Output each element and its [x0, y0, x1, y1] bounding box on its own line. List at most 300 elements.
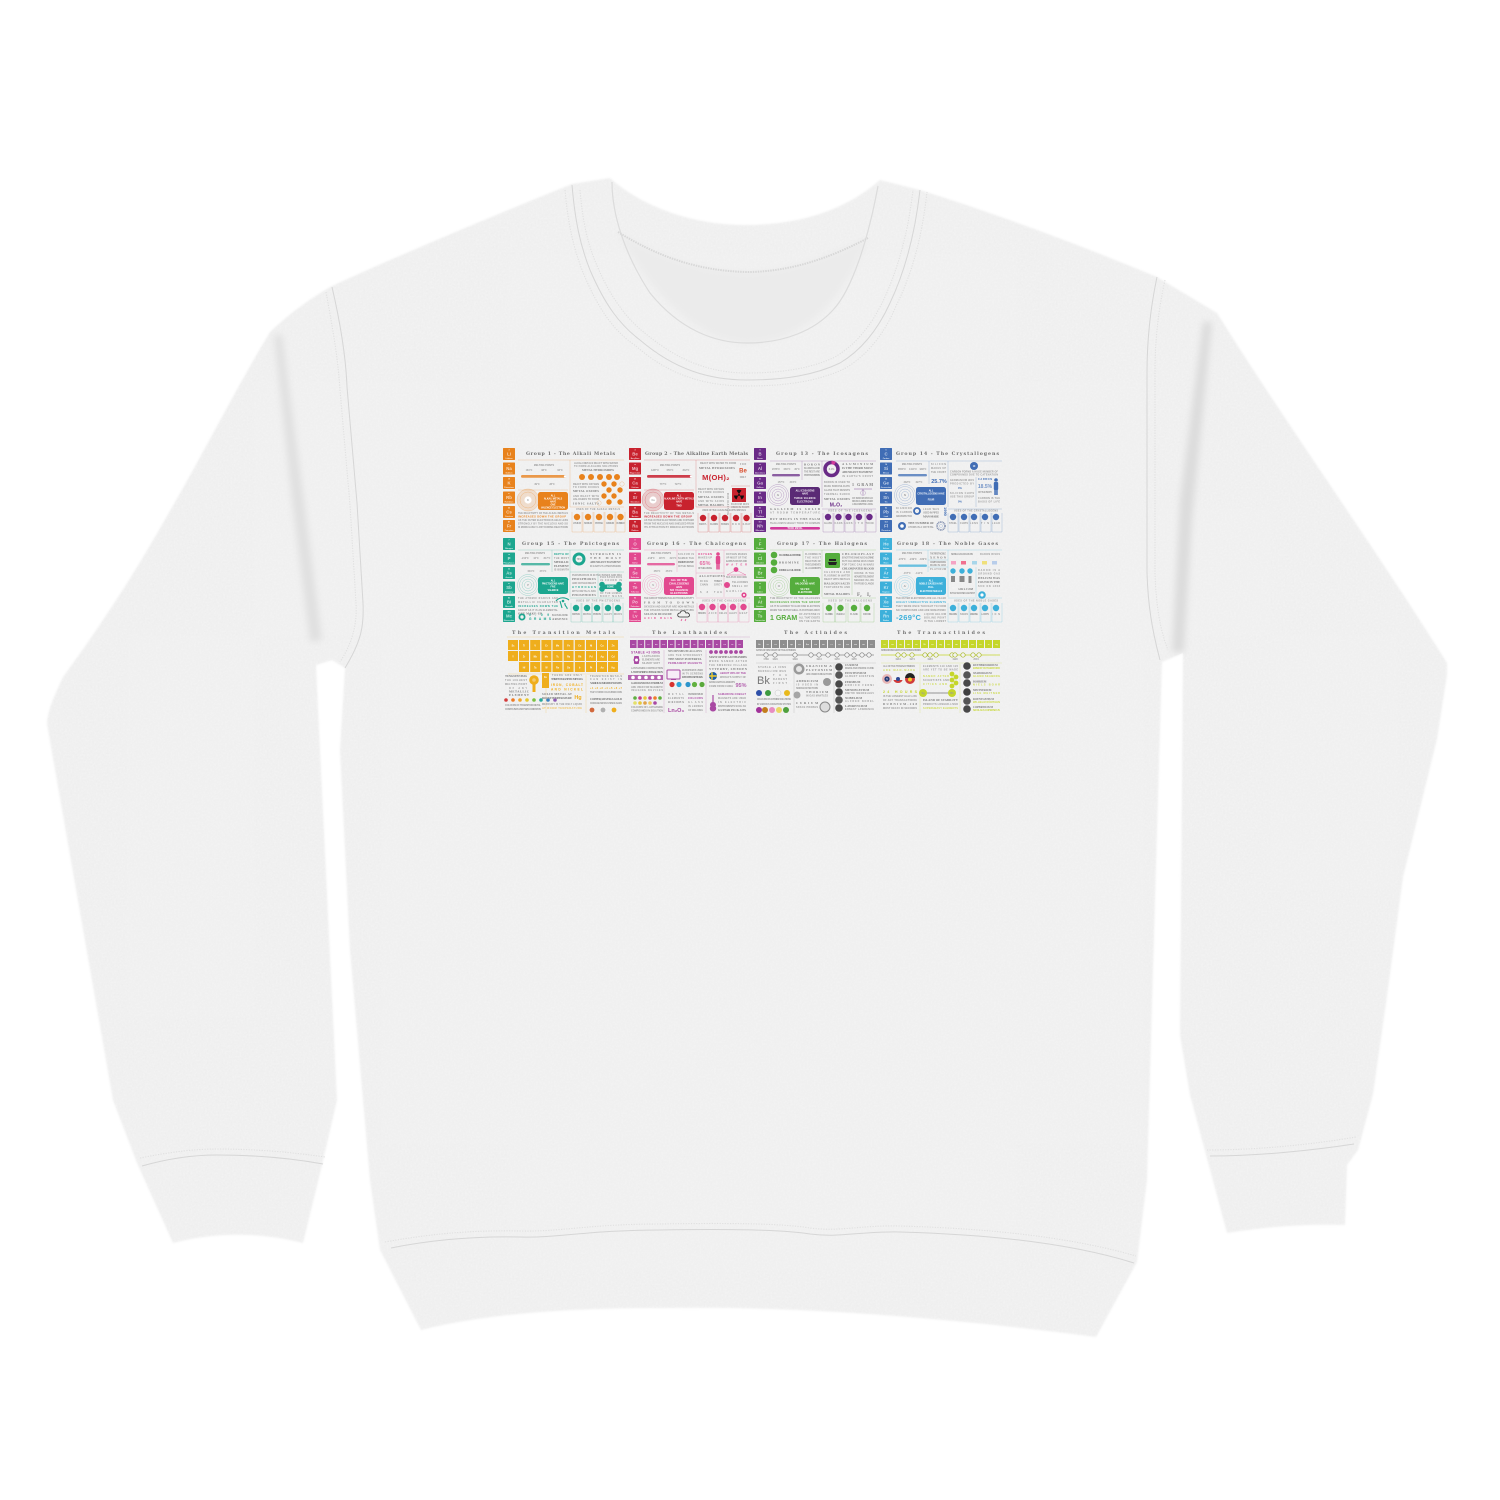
- element column: Radium: [632, 530, 639, 532]
- half-life text: MOST DECAY IN SECONDS: [883, 707, 917, 710]
- predictions text: ELEMENTS 119 AND 120: [923, 665, 959, 668]
- element column: 8: [634, 540, 636, 542]
- silicon stat: THE CRUST: [931, 471, 947, 474]
- discovery timeline: 1899: [792, 658, 798, 661]
- element column: Sb: [506, 585, 512, 590]
- uses cards: X-RAY: [742, 523, 751, 526]
- valence callout: HAVE: [676, 586, 683, 589]
- hem seam: [391, 1229, 1134, 1263]
- element strip: Cn: [947, 644, 951, 646]
- element tile grid: Re: [556, 668, 560, 670]
- melting points chart: -210°C: [521, 557, 529, 560]
- valence callout: THREE VALENCE: [794, 497, 816, 500]
- element strip: Fm: [846, 644, 849, 646]
- berkelium text: THE: [773, 674, 787, 677]
- atom diagram: P: [527, 584, 529, 587]
- 95 percent stat: 95%: [735, 683, 747, 689]
- atom diagram: K: [527, 499, 529, 502]
- element strip: Mt: [923, 643, 926, 646]
- element column: B: [758, 452, 762, 456]
- temperature stat: -269°C: [896, 613, 922, 622]
- magnetic metals text: IRON, COBALT: [551, 683, 583, 687]
- uranium text: AMERICIUM: [796, 679, 818, 683]
- oxides: IN LENSES: [688, 705, 703, 708]
- element strip: [630, 640, 743, 648]
- element column: Gallium: [757, 487, 764, 489]
- valence callout: ALL OF THE: [671, 578, 687, 582]
- element column: 17: [759, 554, 761, 556]
- chloroplast text: FOR TOXIC GAS IN WARS: [842, 564, 874, 566]
- valence callout: ELECTRONS: [798, 592, 813, 594]
- element column: Bromine: [756, 577, 764, 579]
- nitrogen text: THE MOST: [590, 556, 622, 560]
- fluorine text: THE ELEMENTS: [805, 564, 821, 566]
- element column: 87: [508, 522, 510, 524]
- panel: group 18 noble gases: [880, 538, 1002, 623]
- reactivity text: ONE MAKE-UP: [518, 612, 542, 616]
- uranium text: PLUTONIUM: [806, 668, 832, 672]
- valence callout: HAVE: [802, 492, 809, 496]
- 95 percent stat: ABOUT 95% OF THE: [720, 671, 746, 675]
- scientist portraits and names: [963, 662, 1000, 713]
- uses cards: [698, 509, 751, 532]
- element strip: U: [783, 644, 785, 646]
- bismuth text: [554, 552, 570, 572]
- element tile grid: V: [534, 646, 536, 648]
- selenium text: IN THE BIBLE: [678, 565, 694, 568]
- element column: Pb: [883, 510, 889, 514]
- gadolinium text: ARE USED FOR MAGNETIC: [631, 686, 663, 689]
- scientist portraits and names: COPERNICIUM: [973, 706, 993, 709]
- element column: Kr: [884, 585, 889, 590]
- magnetic metals text: THERE ARE ONLY: [552, 674, 582, 677]
- heading: Group 18 - The Noble Gases: [897, 541, 998, 547]
- element strip: Np: [790, 644, 794, 646]
- oxidation states: CAN EXIST IN: [590, 678, 622, 681]
- stability text: PREDICTS LONGER-LIVED: [923, 703, 958, 706]
- rainbow oxidation circles: COLOURS OF TRANSITION METAL: [505, 704, 542, 707]
- uses cards: BONES: [721, 523, 729, 526]
- arsenic stat: IS LETHAL DOSE: [552, 614, 568, 617]
- oxidation states: COINAGE METALS SINCE AGES: [590, 702, 622, 705]
- element tile grid: Ir: [579, 668, 581, 670]
- oxides: METAL: [668, 693, 685, 696]
- icon: magenta bar: TOXIC METAL: [787, 527, 803, 530]
- uses cards: ION: [992, 613, 1000, 616]
- element column: Ts: [758, 614, 763, 618]
- element column: 56: [634, 508, 636, 510]
- reactivity text: INCREASES DOWN THE GROUP: [644, 514, 692, 518]
- chloroplast text: IS NOT THE SAME AS CHLORINE: [842, 556, 874, 560]
- element column: Sn: [883, 495, 889, 500]
- icon: bone: BONE: [607, 586, 614, 588]
- hydroxides and oxides: REACT WITH OXYGEN: [573, 483, 599, 486]
- icon: green square: [825, 553, 840, 568]
- uses cards: [823, 510, 876, 532]
- silicon stat: 25.7%: [931, 479, 947, 485]
- xenon text: XENON: [930, 556, 947, 560]
- element column: At: [758, 600, 763, 604]
- element column: Mc: [506, 614, 513, 618]
- arsenic stat: 0.09: [529, 613, 549, 617]
- aluminium text: ALUMINIUM: [842, 462, 873, 466]
- valence callout: ALL: [929, 580, 934, 582]
- oxides: GLASS: [688, 701, 703, 704]
- unreactive text: HIGHLY UNREACTIVE ELEMENTS: [896, 600, 946, 604]
- element column: 31: [759, 478, 761, 480]
- uses cards: USES OF THE CHALCOGENS: [702, 600, 746, 602]
- uranium text: [794, 664, 832, 712]
- sweden text: WERE NAMED AFTER: [709, 660, 747, 663]
- melting points chart: [898, 552, 927, 575]
- magnetic metals text: AND NICKEL: [551, 688, 583, 692]
- selenium text: [678, 553, 694, 568]
- element column: Xenon: [883, 606, 890, 608]
- metal oxides text: RADIOACTIVE: [726, 493, 729, 515]
- uses cards: [823, 600, 874, 622]
- metal hydroxides formula: REACT WITH WATER TO FORM: [700, 462, 736, 465]
- element strip: Sm: [670, 644, 673, 646]
- icon: sweden flag: [709, 672, 717, 680]
- scientist portraits and names: MENDELEVIUM: [845, 688, 869, 692]
- valence callout: ALL: [677, 494, 682, 498]
- reactivity text: FROM TO DOWN: [644, 600, 695, 604]
- melting points chart: MELTING POINTS: [525, 552, 545, 555]
- melting points chart: [521, 552, 551, 573]
- reactivity text: IS MORE EASILY LOST DURING REACTIONS: [518, 526, 568, 529]
- element column: 81: [759, 508, 761, 510]
- valence callout: TWO: [676, 506, 682, 508]
- element column: O: [633, 542, 637, 546]
- bismuth text: THE MOST: [554, 557, 570, 560]
- element tile grid: Pd: [590, 656, 593, 658]
- element column: Barium: [632, 516, 639, 518]
- uses cards: POISON: [593, 613, 601, 616]
- actinide colour circles: [756, 690, 791, 713]
- element strip: Es: [838, 644, 841, 646]
- alkali metal uses cards: POTASH: [595, 522, 603, 525]
- element column: Iodine: [757, 591, 763, 593]
- uses cards: LEAD: [992, 522, 1000, 525]
- sweden text: YTTERBY, SWEDEN: [709, 667, 748, 671]
- heading: The Transition Metals: [512, 630, 615, 636]
- halide text: FLUORINE IN WATER: [824, 574, 850, 578]
- element strip: Tb: [693, 644, 696, 646]
- uses cards: MATCH: [583, 613, 591, 616]
- mid text: USE THIS GROUP: [950, 496, 974, 498]
- gallium text: BUT MELTS IN THE PALM: [770, 517, 820, 521]
- silicon stat: [931, 463, 947, 485]
- element column: Livermorium: [629, 620, 641, 622]
- chloroplast text: CHLOROPLAST: [842, 552, 875, 556]
- tellurium text and circles: EARTH'S CRUST AND: [726, 560, 747, 563]
- bone text: PHOSPHORUS: [600, 576, 622, 579]
- xenon text: MADE IN 1962: [930, 564, 947, 567]
- bone text: IS FOUND IN: [600, 579, 622, 582]
- unreactive text: THE OUTER ELECTRONS ARE ALL FILLED: [896, 597, 946, 600]
- connected circles: [919, 689, 956, 697]
- berkelium text: [758, 666, 788, 685]
- element column: Nitrogen: [505, 547, 514, 550]
- reactivity text: AS THE OUTER ELECTRONS ARE FURTHER: [644, 519, 694, 522]
- element column: 55: [508, 508, 510, 510]
- scientist portraits and names: ENRICO FERMI: [845, 684, 874, 687]
- element column: Na: [506, 466, 512, 471]
- valence callout: [790, 577, 820, 595]
- element column: Sodium: [506, 472, 513, 474]
- panel: group 1 alkali metals: [503, 448, 625, 532]
- metal hydroxides formula: M(OH)₂: [702, 473, 730, 482]
- melting points chart: 660°C: [784, 468, 791, 471]
- allotropes: RING: [700, 580, 708, 583]
- discovery timeline: 1829: [772, 658, 778, 661]
- tungsten text: METALLIC: [509, 690, 529, 694]
- one gram and balance icon: DRAW A WIRE OVER: [852, 500, 873, 503]
- element column: 51: [508, 583, 510, 585]
- predictions text: ARE YET TO BE MADE: [923, 668, 958, 672]
- hydroxides and oxides: METAL OXIDES: [573, 489, 599, 493]
- half-life text: [883, 690, 918, 710]
- bone text: BODY MASS: [600, 595, 622, 598]
- uses cards: CHIPS: [960, 522, 968, 525]
- element column: [880, 448, 892, 532]
- valence callout: SIX VALENCE: [670, 588, 688, 592]
- discovery timeline: [881, 649, 1000, 661]
- reactivity text: OXYGEN AND SULFUR ARE NON-METALS: [644, 606, 694, 608]
- element column: 34: [634, 568, 637, 570]
- tellurium text and circles: SULFUR DIOXIDE: [726, 576, 747, 579]
- hydroxides and oxides: AND REACT WITH: [573, 495, 599, 498]
- europium text: THE MOST POWERFUL: [668, 657, 702, 661]
- carbon in body: CARBON IS THE: [978, 497, 1000, 500]
- connected circles: Bh: [950, 692, 954, 695]
- element column: Sulfur: [632, 562, 638, 564]
- temperature stat: BOILING POINT: [924, 616, 947, 620]
- radium text: [731, 503, 750, 509]
- element column: 15: [508, 554, 510, 556]
- heading: The Lanthanides: [652, 630, 727, 636]
- melting points chart: MELTING POINTS: [534, 464, 554, 467]
- element column: Ga: [757, 480, 763, 486]
- oxides: PRASEODYMIUM: [688, 693, 703, 696]
- element column: 85: [759, 598, 761, 600]
- element strip: Md: [854, 644, 858, 646]
- melting points chart: 98°C: [541, 469, 547, 472]
- element column: Aluminium: [755, 471, 765, 474]
- element column: 113: [758, 522, 762, 524]
- melting points chart: 115°C: [659, 557, 666, 560]
- gallium/hg text: [542, 692, 582, 710]
- reactivity text: [518, 512, 568, 529]
- panel: group 14 crystallogens: [880, 448, 1002, 532]
- printed periodic table infographic: [503, 448, 1002, 714]
- oxides text: METAL OXIDES: [824, 497, 850, 501]
- allotropes: TRIMET: [714, 580, 723, 583]
- oxides: OXIDES: [668, 700, 684, 704]
- silicon stat: MAKES UP: [931, 467, 946, 470]
- element column: Tl: [758, 510, 762, 514]
- discovery timeline: DATES OF DISCOVERY OF THE ACTINIDES: [756, 649, 796, 652]
- element strip: Tm: [723, 644, 726, 646]
- element strip: Pa: [774, 644, 778, 646]
- halide text: REACT WITH METALS: [824, 578, 850, 581]
- gallium text: THALLIUM IS HIGHLY TOXIC TO HUMANS: [770, 522, 820, 525]
- uses cards: BALLOON: [949, 613, 957, 616]
- reactivity text: THE ATOMIC RADIUS AND: [518, 597, 558, 600]
- one gram and balance icon: A KILOMETRE LONG: [852, 503, 873, 506]
- halide text: HALOGEN SALTS: [824, 582, 850, 586]
- reactivity text: INCREASES DOWN THE GROUP: [518, 514, 566, 518]
- berkelium symbol: Bk: [757, 675, 770, 687]
- element strip: Pr: [648, 644, 650, 646]
- uses cards: RED: [732, 523, 740, 526]
- radon text: HELIUM WAS: [978, 576, 1000, 580]
- selenium text: NAMED THE: [678, 557, 694, 560]
- beryllium exception: F O R: [740, 463, 746, 466]
- melting points chart: 777°C: [660, 483, 667, 486]
- element strip: Rg: [939, 644, 943, 646]
- scientist portraits and names: MARIE AND PIERRE CURIE: [845, 667, 874, 670]
- element column: Arsenic: [506, 576, 512, 579]
- valence callout: [538, 577, 568, 594]
- element column: Si: [884, 466, 888, 471]
- scientist portraits and names: [835, 663, 875, 712]
- uses cards: BLEACH: [836, 613, 845, 616]
- uranium text: CURIUM: [796, 701, 818, 705]
- element column: Antimony: [505, 590, 514, 593]
- element column: 2: [885, 540, 887, 542]
- predictions text: SCIENTISTS AND: [923, 679, 949, 682]
- mid text: SILICON CHIPS: [950, 492, 974, 495]
- aluminium text: ABUNDANT ELEMENT: [842, 470, 874, 474]
- half-life text: 24 HOURS: [883, 690, 918, 694]
- scientist portraits and names: WILHELM RÖNTGEN: [973, 699, 1000, 704]
- uranium text: SMOKE DETECTORS: [796, 687, 818, 690]
- reactivity text: INCREASES DOWN THE: [518, 604, 558, 608]
- element column: Potassium: [504, 486, 514, 489]
- element strip: Th: [766, 644, 769, 646]
- icon: eye of horus: [556, 598, 569, 609]
- allotropes: CHAIN: [700, 584, 708, 586]
- chloroplast text: CHLORINATED BLOOD: [842, 566, 875, 570]
- tungsten text: [505, 674, 530, 697]
- uses cards: USES OF THE HALOGENS: [828, 600, 872, 602]
- uses cards: ALLOY: [729, 612, 737, 615]
- panel: transition metals: [504, 630, 624, 713]
- colour circles grid: COLOURS OF LANTHANIDE: [631, 706, 663, 709]
- melting points chart: [647, 464, 692, 486]
- element strip: Dy: [700, 644, 704, 646]
- element column: Radon: [883, 620, 890, 622]
- valence callout: [790, 487, 820, 505]
- scientist portraits and names: BOHRIUM: [973, 680, 987, 684]
- bone text: [600, 576, 622, 598]
- nitrogen uses text: HYDROGEN: [572, 585, 596, 589]
- metal oxides text: REACT WITH OXYGEN: [698, 488, 724, 491]
- carbon in body: CARBON: [978, 478, 992, 481]
- xenon text: PLATINUM: [930, 568, 946, 571]
- element column: Strontium: [631, 500, 640, 503]
- melting points chart: 63°C: [557, 469, 563, 472]
- berkelium text: RAREST: [773, 678, 788, 681]
- melting points chart: [898, 463, 927, 484]
- carbon isotopes badge: CARBON FORMS A HUGE NUMBER OF: [950, 470, 999, 474]
- melting points chart: -249°C: [909, 558, 917, 561]
- element column: Fr: [507, 524, 511, 528]
- tellurium text and circles: OXYGEN MAKES: [726, 553, 747, 556]
- left sleeve seam: [332, 287, 363, 668]
- donut: nitrogen: 78%: [577, 558, 582, 561]
- element column: I: [759, 585, 761, 590]
- nitrogen text: IN EARTH'S ATMOSPHERE: [590, 565, 621, 568]
- dot row: [709, 650, 743, 654]
- hydroxides and oxides: TO FORM OXIDES: [573, 486, 599, 489]
- element column: Boron: [757, 458, 764, 460]
- element column: Bi: [507, 600, 511, 604]
- icon: light bulb: [529, 675, 539, 692]
- scientist portraits and names: DMITRI MENDELEEV: [845, 692, 874, 695]
- bismuth text: DEPTH OF: [554, 552, 569, 556]
- sweatshirt: [0, 150, 1500, 1350]
- oxygen stat and body icon: OXYGEN: [698, 552, 712, 556]
- uranium text: ARE USED IN REACTORS: [806, 673, 832, 676]
- predictions text: NAMED AFTER: [923, 674, 949, 678]
- icon: circle: [898, 522, 906, 530]
- melting points chart: 650°C: [667, 469, 674, 472]
- uses cards: GLASS: [824, 522, 832, 525]
- ring icon and text: MAN-MADE: [923, 514, 939, 518]
- oxides text: [824, 481, 850, 508]
- mid text: GERMANIUM WAS: [950, 479, 974, 482]
- halide text: METAL HALIDES: [824, 592, 850, 596]
- element tile grid: Au: [600, 666, 604, 670]
- panel: actinides: [756, 630, 876, 713]
- man-made text: ARE MAN-MADE: [883, 668, 915, 672]
- element column: Helium: [883, 548, 889, 550]
- element column: P: [508, 556, 511, 561]
- valence callout: ELECTRONS: [797, 502, 813, 504]
- element tile grid: Ta: [534, 668, 537, 670]
- element column: Sr: [633, 495, 638, 500]
- atom diagram: Al: [777, 494, 780, 497]
- element tile grid: Ag: [600, 656, 604, 658]
- reactivity text: SULFUR DIOXIDE: [644, 612, 672, 616]
- panel: group 17 halogens: [754, 538, 876, 623]
- element column: 88: [634, 522, 636, 524]
- element column: 33: [508, 568, 510, 570]
- halide text: [824, 571, 875, 598]
- element tile grid: Hf: [523, 668, 525, 670]
- alkali metal uses cards: SODIUM: [584, 522, 592, 525]
- guitar text and icon: IN ELECTRIC: [718, 701, 746, 704]
- sweden text: MANY OF THE LANTHANIDES: [709, 655, 747, 659]
- icon: gear: [937, 522, 945, 530]
- element column: 83: [508, 598, 510, 600]
- melting points chart: -218°C: [647, 557, 655, 560]
- uses cards: MEDS: [614, 613, 622, 616]
- element tile grid: W: [545, 668, 548, 670]
- valence callout: HAVE: [676, 500, 683, 504]
- uses cards: FLUORIDE: [825, 613, 833, 616]
- element column: Lithium: [506, 457, 513, 460]
- element column: Ra: [632, 524, 638, 528]
- uranium text: IS USED IN: [796, 684, 818, 686]
- element strip: Cm: [814, 644, 817, 646]
- uses cards: CELLS: [719, 612, 727, 615]
- uses cards: ACID: [708, 612, 717, 615]
- valence callout: CRYSTALLOGENS HAVE: [917, 492, 945, 496]
- stable ions: LANTHANIDE CONTRACTION: [631, 670, 664, 674]
